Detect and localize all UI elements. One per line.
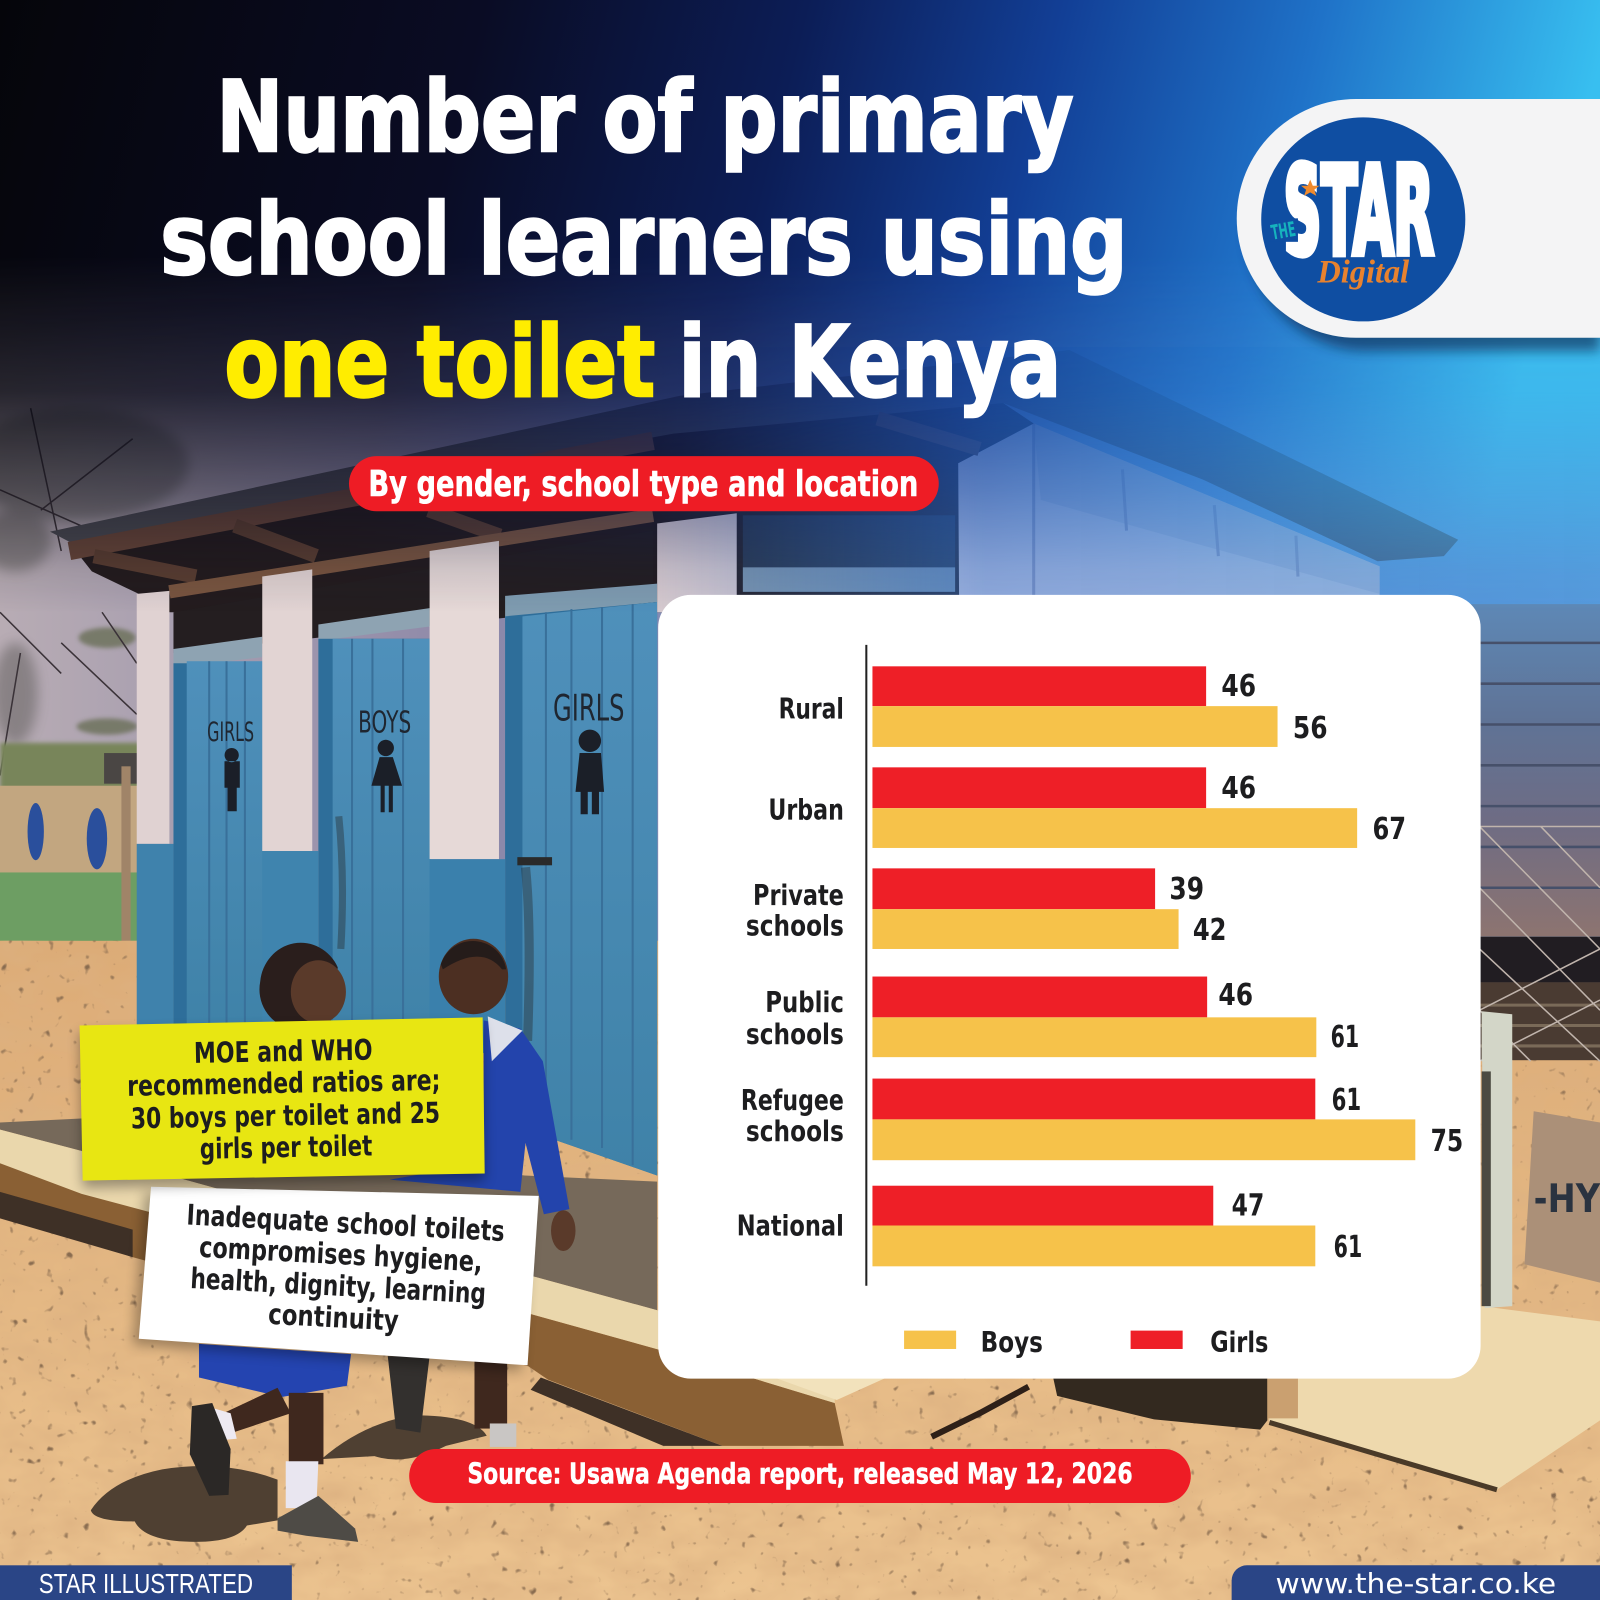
row: public schools: 46 xyxy=(1218,978,1253,1013)
door: boys: BOYS xyxy=(358,706,411,741)
callout: recommended ratios: recommended ratios are; xyxy=(127,1063,441,1103)
walkway and curb xyxy=(0,1118,898,1446)
row: rural xyxy=(779,666,1328,747)
row: urban xyxy=(768,767,1406,848)
row: refugee schools: schools xyxy=(746,1114,844,1148)
row: national xyxy=(737,1186,1362,1266)
legend: Girls xyxy=(1210,1325,1268,1359)
logo circle xyxy=(1261,117,1465,321)
row: public schools xyxy=(746,977,1359,1057)
logo word Digital: Digital xyxy=(1316,255,1410,291)
callout: recommended ratios xyxy=(80,1017,485,1188)
row: national: National xyxy=(737,1209,844,1243)
toilet block roof xyxy=(50,350,1458,612)
row: rural: 56 xyxy=(1293,711,1328,746)
row: urban: 67 xyxy=(1372,812,1406,847)
ground xyxy=(0,941,1600,1600)
distant field and vegetation xyxy=(0,743,143,957)
title: one toilet xyxy=(224,306,655,420)
door: boys xyxy=(318,639,431,1047)
title: Number of primary xyxy=(216,61,1073,175)
source pill: Source: Usawa Agenda report, released May 12, 2026 xyxy=(467,1457,1133,1491)
door: girls left xyxy=(173,661,264,1031)
title: school learners using xyxy=(160,183,1128,297)
subtitle pill xyxy=(349,456,939,511)
callout: recommended ratios: 30 boys per toilet and 25 xyxy=(131,1096,440,1135)
boy xyxy=(388,939,576,1447)
row: urban: Urban xyxy=(768,792,844,826)
row: rural: 46 xyxy=(1221,669,1256,704)
right block wall and fence xyxy=(1469,604,1600,1061)
row: public schools: Public xyxy=(765,985,844,1019)
logo word THE: THE xyxy=(1269,217,1297,245)
pillars xyxy=(137,513,737,1053)
ground shadows xyxy=(91,1415,487,1542)
row: private schools xyxy=(746,868,1227,949)
title xyxy=(160,61,1128,420)
top blue-black gradient overlay xyxy=(0,0,1600,633)
title: in Kenya xyxy=(679,306,1061,420)
door: girls right xyxy=(505,602,657,1176)
row: refugee schools: 75 xyxy=(1431,1124,1463,1159)
legend: Boys xyxy=(981,1325,1043,1359)
legend xyxy=(904,1325,1268,1359)
children xyxy=(190,939,576,1542)
logo tab xyxy=(1237,99,1600,351)
callout: inadequate toilets: Inadequate school toilets xyxy=(186,1197,505,1248)
footer left: star illustrated: STAR ILLUSTRATED xyxy=(39,1568,253,1599)
row: refugee schools: Refugee xyxy=(741,1083,844,1117)
source pill xyxy=(409,1449,1191,1503)
toilet block right wall xyxy=(958,423,1380,612)
door: girls left: GIRLS xyxy=(207,717,254,748)
row: private schools: schools xyxy=(746,909,844,943)
row: private schools: 39 xyxy=(1169,872,1204,907)
callout: inadequate toilets: health, dignity, learning xyxy=(190,1261,487,1310)
row: national: 47 xyxy=(1232,1188,1264,1223)
row: refugee schools xyxy=(741,1079,1463,1160)
door: girls right: GIRLS xyxy=(553,686,624,729)
callout: recommended ratios: girls per toilet xyxy=(200,1128,373,1166)
row: private schools: Private xyxy=(753,878,844,912)
row: public schools: 61 xyxy=(1331,1020,1359,1055)
callout: inadequate toilets: compromises hygiene, xyxy=(198,1230,483,1279)
row: rural: Rural xyxy=(779,691,844,725)
logo word THE xyxy=(1269,217,1298,245)
row: private schools: 42 xyxy=(1193,913,1227,948)
callout: inadequate toilets xyxy=(133,1187,539,1371)
upper window bay xyxy=(173,515,955,667)
tree silhouettes xyxy=(0,408,189,776)
row: urban: 46 xyxy=(1221,771,1256,806)
row: national: 61 xyxy=(1334,1230,1362,1265)
row: refugee schools: 61 xyxy=(1332,1083,1361,1118)
logo star xyxy=(1301,180,1319,196)
right side blue overlay xyxy=(683,350,1600,604)
subtitle pill: By gender, school type and location xyxy=(368,464,918,505)
callout: inadequate toilets: continuity xyxy=(267,1297,400,1338)
footer right: website: www.the-star.co.ke xyxy=(1276,1568,1556,1600)
callout: recommended ratios: MOE and WHO xyxy=(194,1033,373,1070)
row: public schools: schools xyxy=(746,1017,844,1051)
footer right: website xyxy=(1232,1565,1600,1600)
panel: bar chart xyxy=(658,595,1481,1379)
girl xyxy=(190,943,358,1542)
concrete base and sign xyxy=(932,1011,1600,1490)
